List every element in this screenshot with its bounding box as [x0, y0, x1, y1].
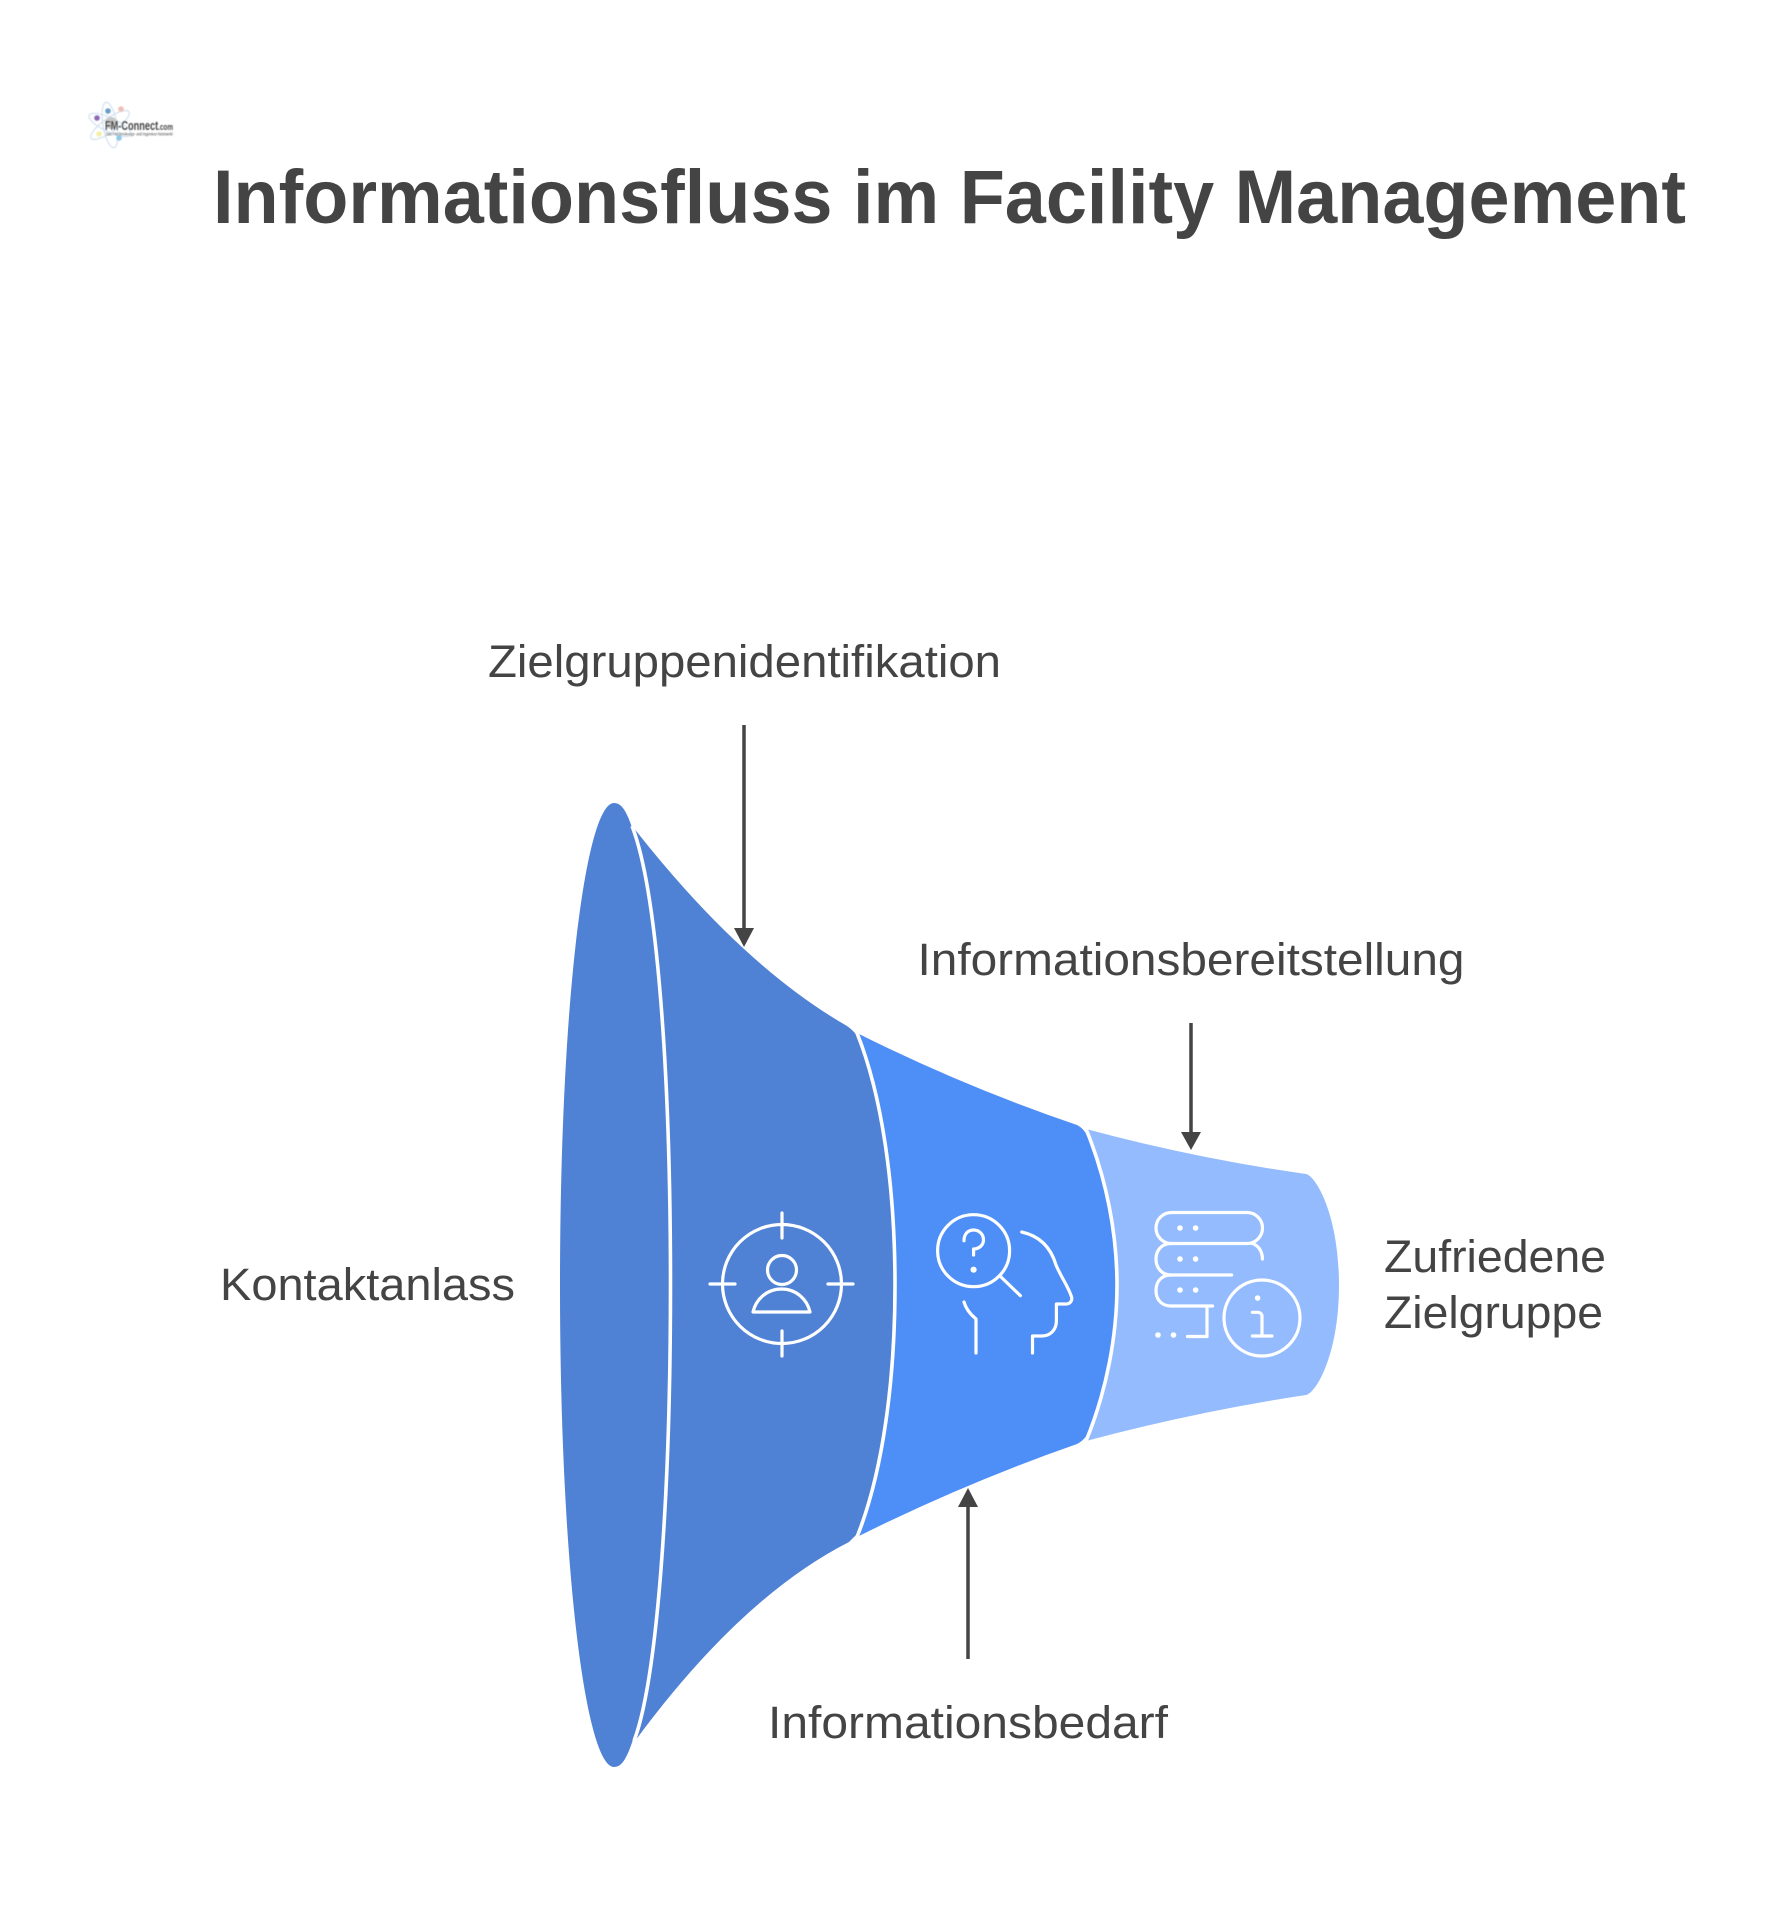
- icon: target person: [710, 1213, 853, 1356]
- arrow: Informationsbedarf: [958, 1488, 978, 1659]
- arrow: Informationsbereitstellung: [1181, 1023, 1201, 1150]
- logo: FM-Connect: [86, 101, 173, 149]
- icon: server with info: [1155, 1212, 1300, 1356]
- label: Zufriedene Zielgruppe: Zielgruppe: [1384, 1287, 1603, 1338]
- label: Zufriedene Zielgruppe: Zufriedene: [1384, 1231, 1606, 1282]
- funnel mouth: Kontaktanlass: [560, 803, 670, 1767]
- funnel segment: Zufriedene Zielgruppe: [1086, 1129, 1339, 1441]
- logo: FM-Connect: Das FM-Beratungs- und Ingenieur-Netzwerk!: [106, 132, 173, 136]
- funnel segment: Informationsbedarf: [857, 1033, 1117, 1537]
- funnel: [560, 803, 1339, 1767]
- label: Kontaktanlass: Kontaktanlass: [220, 1259, 515, 1310]
- label: Informationsbedarf: Informationsbedarf: [768, 1697, 1169, 1748]
- funnel segment: Zielgruppenidentifikation: [620, 827, 895, 1741]
- label: Zufriedene Zielgruppe: [1384, 1231, 1606, 1338]
- logo: FM-Connect: FM-Connect.com: [105, 118, 173, 133]
- label: Informationsbereitstellung: Informationsbereitstellung: [918, 934, 1464, 985]
- title: Informationsfluss im Facility Management: [213, 155, 1686, 240]
- icon: head with magnifier: [938, 1215, 1072, 1353]
- arrow: Zielgruppenidentifikation: [734, 725, 754, 947]
- label: Zielgruppenidentifikation: Zielgruppenidentifikation: [488, 636, 1001, 687]
